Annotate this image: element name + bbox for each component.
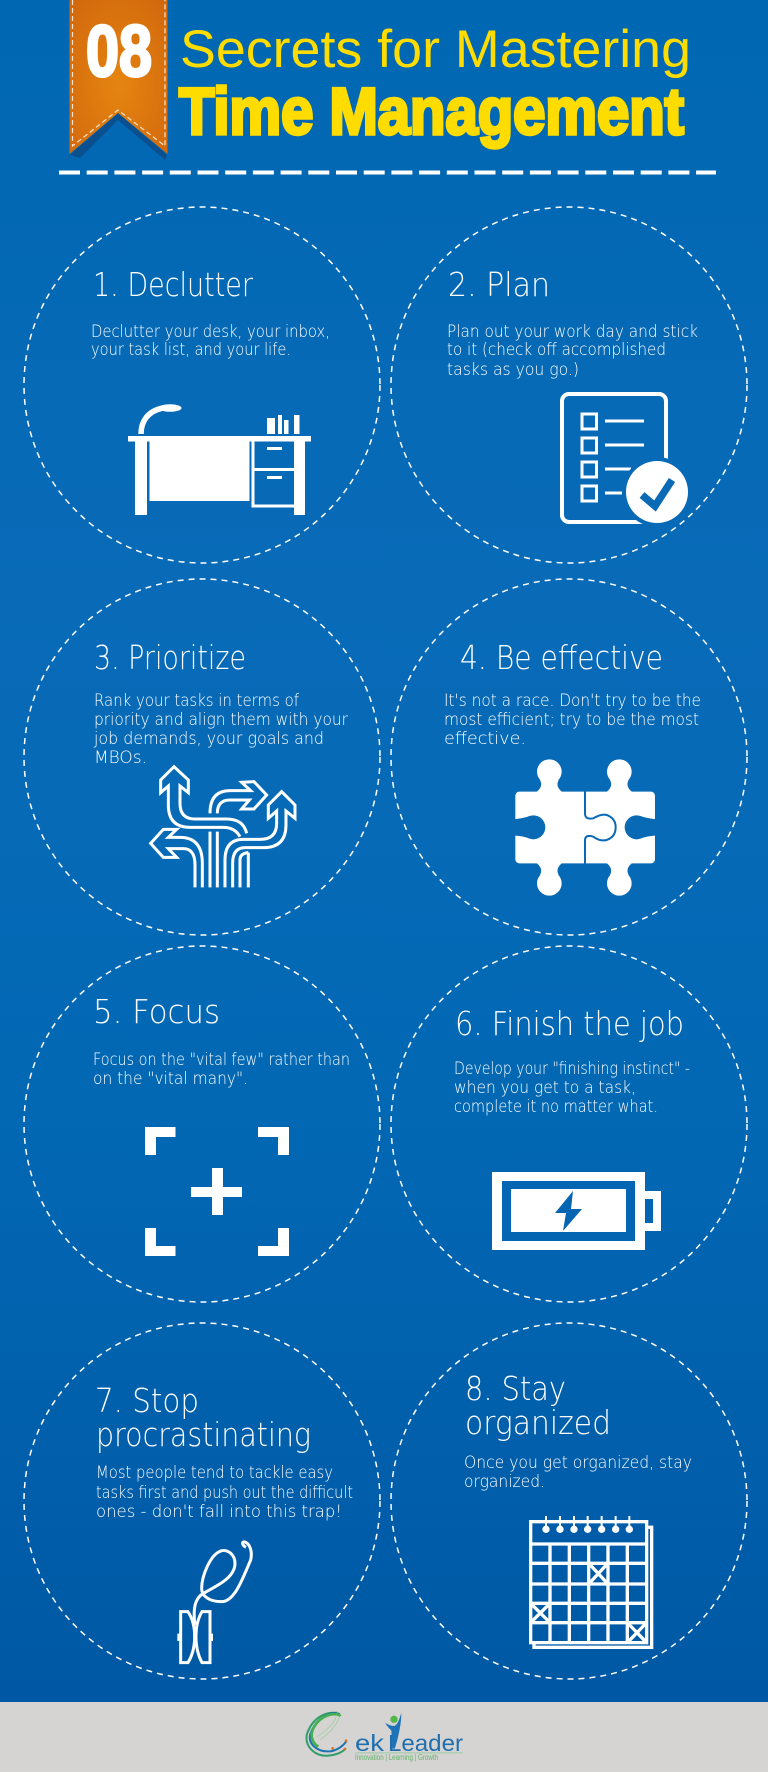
text block: when you get to a task,: [454, 1078, 636, 1097]
text block: [464, 1453, 692, 1491]
text block: [454, 1059, 690, 1116]
text block: tasks as you go.): [447, 360, 579, 379]
logo: ekLeader: [307, 1713, 463, 1762]
text block: Focus on the "vital few" rather than: [93, 1050, 350, 1069]
text block: Rank your tasks in terms of: [94, 691, 299, 710]
heading: 5. Focus: [93, 992, 220, 1031]
text block: [93, 1050, 350, 1088]
text block: complete it no matter what.: [454, 1097, 658, 1116]
heading: 8. Stay: [465, 1369, 566, 1408]
text block: [91, 322, 330, 359]
icon: calendar: [531, 1516, 652, 1647]
text block: Declutter your desk, your inbox,: [91, 322, 330, 341]
text block: your task list, and your life.: [91, 340, 291, 359]
title: Time Management: [179, 74, 684, 148]
text block: job demands, your goals and: [93, 729, 324, 748]
text block: [96, 1463, 353, 1521]
heading: 4. Be effective: [460, 638, 663, 677]
text block: on the "vital many".: [93, 1069, 248, 1088]
panel: 7 stop procrastinating: [24, 1323, 380, 1679]
text block: It's not a race. Don't try to be the: [444, 691, 701, 710]
heading: 1. Declutter: [93, 265, 253, 304]
icon: focus frame: [145, 1127, 289, 1256]
text block: [444, 691, 701, 748]
icon: puzzle pieces: [513, 759, 657, 896]
heading: 6. Finish the job: [455, 1004, 684, 1043]
heading: 3. Prioritize: [94, 638, 246, 677]
text block: Most people tend to tackle easy: [96, 1463, 333, 1482]
logo: ekLeader: Innovation | Learning | Growth: [355, 1753, 438, 1762]
heading: 7. Stop: [95, 1381, 199, 1420]
text block: Develop your "finishing instinct" -: [454, 1059, 690, 1078]
text block: effective.: [444, 729, 526, 748]
text block: priority and align them with your: [94, 710, 348, 729]
text block: [447, 322, 698, 379]
icon: yo-yo: [177, 1542, 251, 1663]
panel: 8 stay organized: [391, 1323, 747, 1679]
panel: 2 plan: [391, 207, 747, 563]
footer: [0, 1702, 768, 1772]
panel: 4 be effective: [391, 579, 747, 935]
panel: 3 prioritize: [24, 579, 380, 935]
logo: ekLeader: ek: [355, 1730, 385, 1756]
text block: organized.: [464, 1472, 545, 1491]
text block: to it (check off accomplished: [447, 340, 666, 359]
panel: 1 declutter: [24, 207, 380, 563]
title: Secrets for Mastering: [180, 20, 691, 79]
heading: 2. Plan: [448, 265, 550, 304]
heading: organized: [465, 1403, 611, 1442]
text block: MBOs.: [94, 748, 147, 767]
icon: checklist: [562, 394, 692, 527]
logo: ekLeader: Leader: [388, 1730, 463, 1756]
icon: diverging arrows: [151, 767, 295, 887]
title: [179, 20, 691, 148]
text block: tasks first and push out the difficult: [96, 1483, 353, 1502]
badge number: 08: [86, 12, 152, 92]
icon: desk: [128, 404, 311, 515]
panel: 5 focus: [24, 946, 380, 1302]
heading: [95, 1381, 311, 1454]
text block: Once you get organized, stay: [464, 1453, 692, 1472]
heading: [465, 1369, 611, 1442]
heading: procrastinating: [96, 1415, 311, 1454]
text block: [93, 691, 348, 767]
panel: 6 finish the job: [391, 946, 747, 1302]
text block: ones - don't fall into this trap!: [96, 1502, 342, 1521]
text block: Plan out your work day and stick: [447, 322, 698, 341]
text block: most efficient; try to be the most: [444, 710, 699, 729]
icon: battery: [492, 1172, 661, 1250]
ribbon badge: [70, 0, 168, 160]
